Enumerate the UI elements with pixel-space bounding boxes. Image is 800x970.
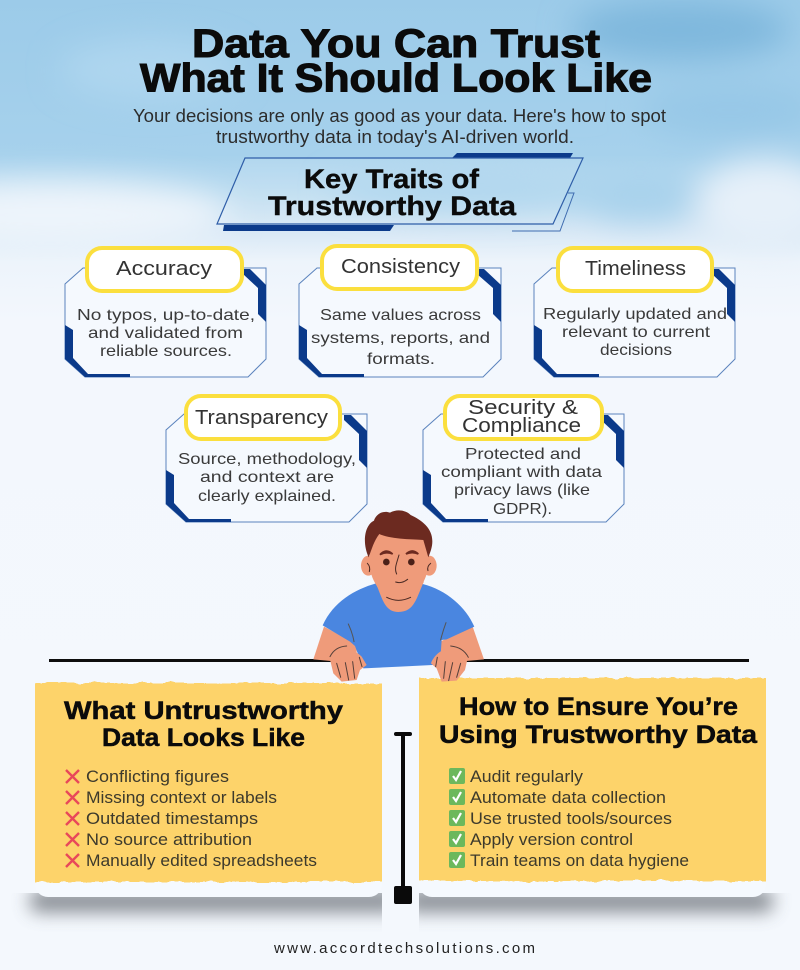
title: What It Should Look Like [140, 56, 652, 100]
panel: ensure trustworthy data [404, 678, 781, 912]
subtitle: trustworthy data in today's AI-driven world. [216, 127, 574, 147]
card: Timeliness: decisions [600, 342, 672, 359]
card: Transparency: and context are [200, 469, 334, 486]
card: Security and Compliance: compliant with data [441, 464, 602, 481]
check icons [449, 768, 465, 868]
panel: untrustworthy data: Conflicting figures [86, 768, 229, 786]
panel: ensure trustworthy data: Apply version control [470, 831, 633, 849]
card: Accuracy: No typos, up-to-date, [77, 307, 255, 324]
card: Transparency: Transparency [195, 407, 328, 429]
vertical connector [394, 732, 412, 904]
card: Consistency: formats. [367, 351, 435, 368]
panel: untrustworthy data: No source attribution [86, 831, 252, 849]
card: Consistency [299, 246, 501, 377]
panel: ensure trustworthy data: How to Ensure You’re [459, 693, 738, 721]
cross icons [66, 770, 79, 867]
panel: untrustworthy data: Missing context or labels [86, 789, 277, 807]
card: Transparency [166, 396, 367, 522]
card: Security and Compliance: Compliance [462, 415, 581, 437]
card: Security and Compliance: GDPR). [493, 501, 552, 518]
card: Accuracy: and validated from [88, 325, 243, 342]
card: Timeliness: Regularly updated and [543, 306, 727, 323]
panel: untrustworthy data [20, 683, 400, 912]
subtitle [133, 106, 666, 147]
card: Consistency: Same values across [320, 307, 481, 324]
card: Security and Compliance: Security & [468, 397, 579, 419]
card: Timeliness: relevant to current [562, 324, 711, 341]
footer url: www.accordtechsolutions.com [273, 940, 535, 957]
card: Security and Compliance: privacy laws (like [454, 482, 590, 499]
panel: ensure trustworthy data: Use trusted tools/sources [470, 810, 672, 828]
divider line [49, 659, 749, 662]
panel: ensure trustworthy data: Automate data collection [470, 789, 666, 807]
panel: ensure trustworthy data: Audit regularly [470, 768, 584, 786]
panel: untrustworthy data: What Untrustworthy [64, 697, 343, 725]
card: Security and Compliance [423, 396, 624, 522]
title [140, 22, 652, 100]
panel shadow [405, 890, 773, 912]
banner: key traits heading: Trustworthy Data [268, 191, 517, 221]
card: Transparency: clearly explained. [198, 488, 336, 505]
panel: untrustworthy data: Manually edited spreadsheets [86, 852, 317, 870]
card: Timeliness: Timeliness [585, 258, 686, 280]
illustration: man leaning on the line [313, 510, 484, 682]
panel shadow [30, 890, 400, 912]
card: Consistency: Consistency [341, 256, 460, 278]
panel: ensure trustworthy data: Using Trustworthy Data [439, 721, 758, 749]
card: Consistency: systems, reports, and [311, 330, 490, 347]
card: Accuracy: reliable sources. [100, 343, 232, 360]
panel: untrustworthy data: Data Looks Like [102, 724, 305, 752]
panel: untrustworthy data: Outdated timestamps [86, 810, 258, 828]
card: Transparency: Source, methodology, [178, 451, 356, 468]
banner: key traits heading [217, 153, 583, 231]
card: Security and Compliance: Protected and [465, 446, 581, 463]
card: Timeliness [534, 248, 735, 377]
card: Accuracy: Accuracy [116, 258, 212, 280]
panel: ensure trustworthy data: Train teams on data hygiene [470, 852, 689, 870]
subtitle: Your decisions are only as good as your data. Here's how to spot [133, 106, 666, 126]
title: Data You Can Trust [192, 22, 600, 66]
banner: key traits heading: Key Traits of [304, 164, 480, 194]
card: Accuracy [65, 248, 266, 377]
